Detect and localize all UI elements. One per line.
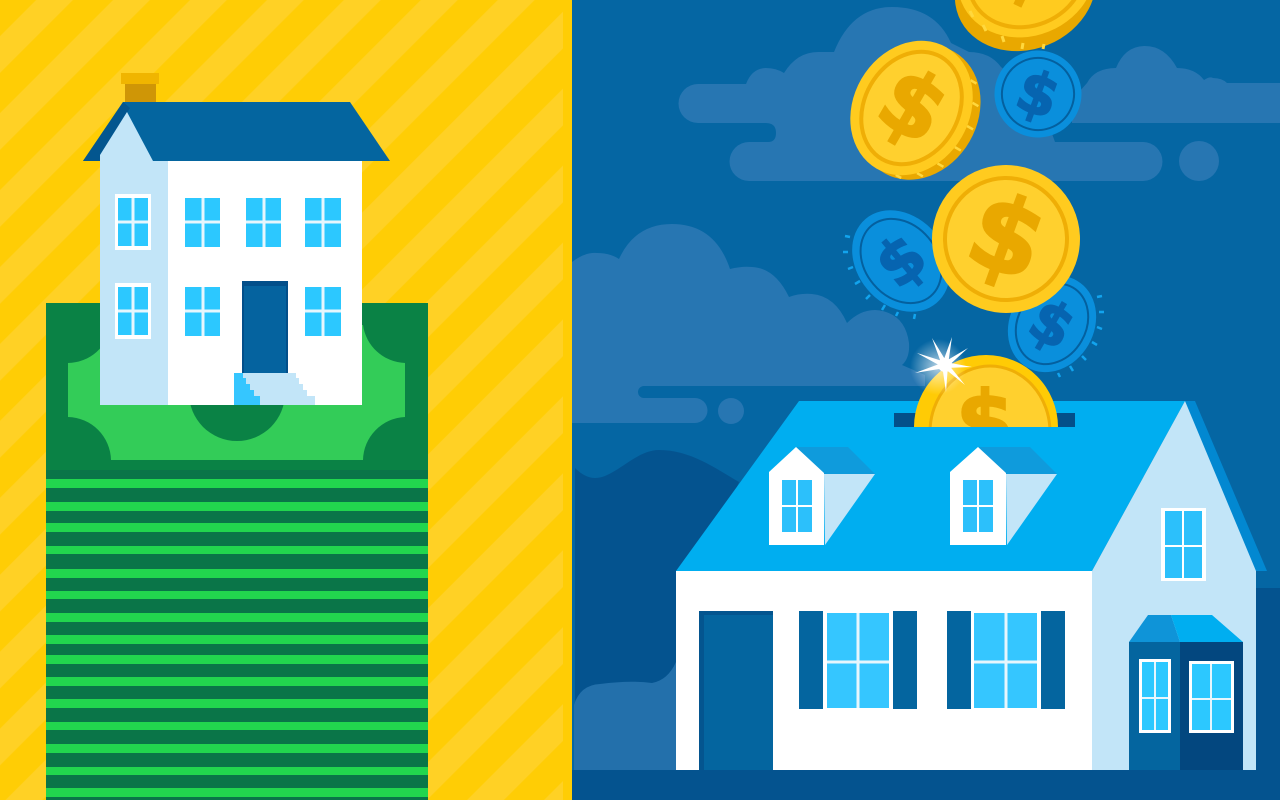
blue coin: back left bbox=[832, 191, 970, 331]
clouds: lower-left sky bbox=[572, 224, 925, 424]
hill: dark distant hill bbox=[575, 450, 739, 771]
bill centre circle bbox=[189, 345, 285, 441]
cash stack bbox=[46, 303, 428, 800]
chimney bbox=[121, 73, 159, 102]
steps bbox=[234, 373, 315, 405]
shuttered window left bbox=[799, 611, 917, 709]
gable wall bbox=[1092, 401, 1256, 770]
coin entering slot bbox=[914, 355, 1058, 427]
gable wing bbox=[100, 112, 168, 405]
sparkle bbox=[910, 337, 972, 395]
main wall bbox=[168, 161, 362, 405]
blue coin: top: $ bbox=[1007, 55, 1069, 133]
bill face bbox=[68, 325, 405, 460]
cloud: bottom-left bbox=[574, 662, 676, 770]
garage door bbox=[699, 611, 773, 770]
gold coin: tilted: $ bbox=[861, 45, 966, 165]
front windows bbox=[185, 198, 341, 336]
porch bbox=[1129, 615, 1243, 770]
dormer left bbox=[769, 447, 875, 545]
door bbox=[242, 281, 288, 373]
gold coin: tilted bbox=[826, 18, 1005, 202]
blue coin: back right bbox=[991, 260, 1113, 388]
wall bbox=[676, 571, 1092, 770]
blue coin: back right: $ bbox=[1018, 284, 1086, 364]
ground strip bbox=[572, 770, 1280, 800]
stacked bill edges bbox=[46, 470, 428, 800]
coin slot bbox=[894, 413, 1075, 427]
gold coin: large centre bbox=[911, 144, 1101, 334]
main roof bbox=[676, 401, 1185, 571]
small house on cash bbox=[83, 73, 390, 405]
stack base bbox=[46, 303, 428, 800]
roof bbox=[83, 102, 390, 161]
gold coin: large centre: $ bbox=[952, 166, 1062, 306]
dormer right bbox=[950, 447, 1057, 545]
clouds: upper sky bbox=[678, 7, 1280, 181]
blue coin: back left: $ bbox=[861, 219, 941, 302]
roof shaded edge bbox=[83, 102, 130, 161]
back roof edge bbox=[1185, 401, 1267, 571]
shuttered window right bbox=[947, 611, 1065, 709]
band: dark background right of house bbox=[1250, 588, 1280, 770]
coin entering slot: $ bbox=[956, 373, 1014, 471]
wing windows bbox=[115, 194, 151, 339]
panel: blue sky background bbox=[572, 0, 1280, 800]
gable window bbox=[1161, 508, 1206, 581]
gold coin: top, cut off bbox=[932, 0, 1118, 72]
panel: yellow striped background bbox=[0, 0, 572, 800]
large house bbox=[676, 355, 1267, 770]
blue coin: top bbox=[982, 38, 1094, 150]
